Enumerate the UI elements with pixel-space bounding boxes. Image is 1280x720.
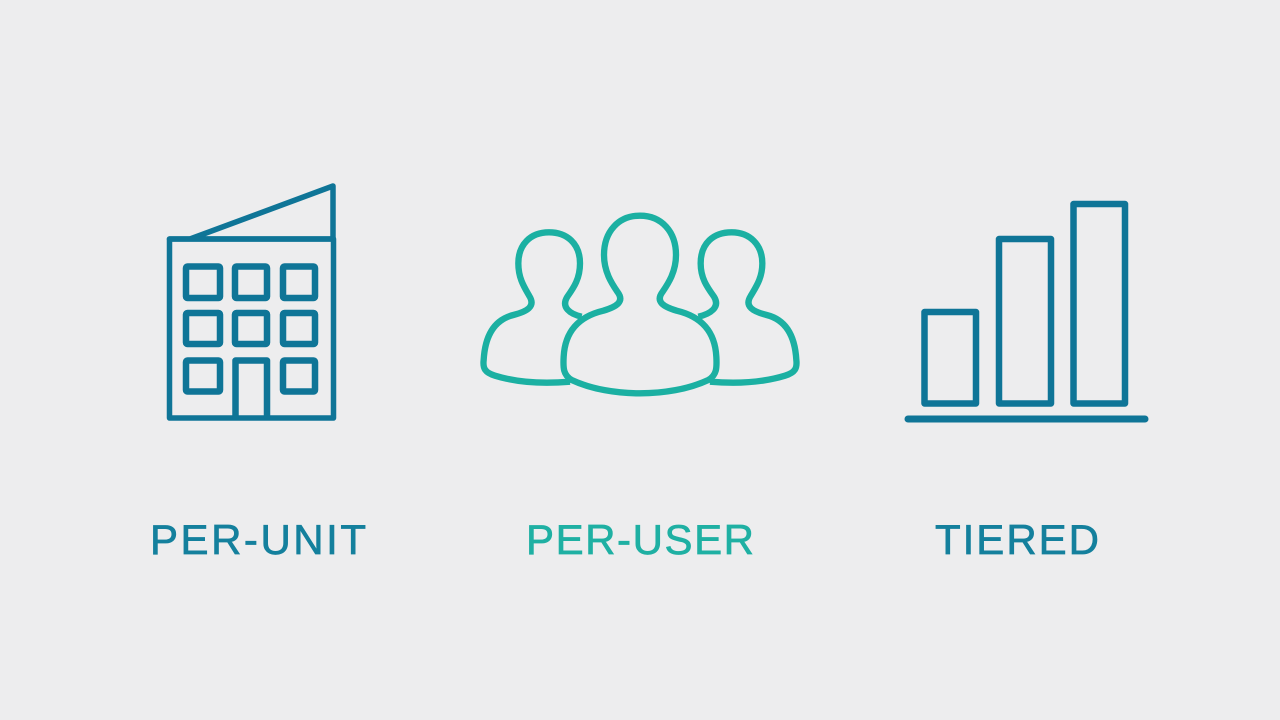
label: per-user: PER-USER bbox=[526, 516, 754, 563]
icon: building (per-unit) bbox=[170, 186, 334, 418]
icon: group of three users (per-user) bbox=[483, 216, 797, 393]
icon: rising bar chart (tiered) bbox=[908, 204, 1145, 419]
label: tiered: TIERED bbox=[935, 516, 1099, 563]
label: per-unit: PER-UNIT bbox=[150, 516, 366, 563]
